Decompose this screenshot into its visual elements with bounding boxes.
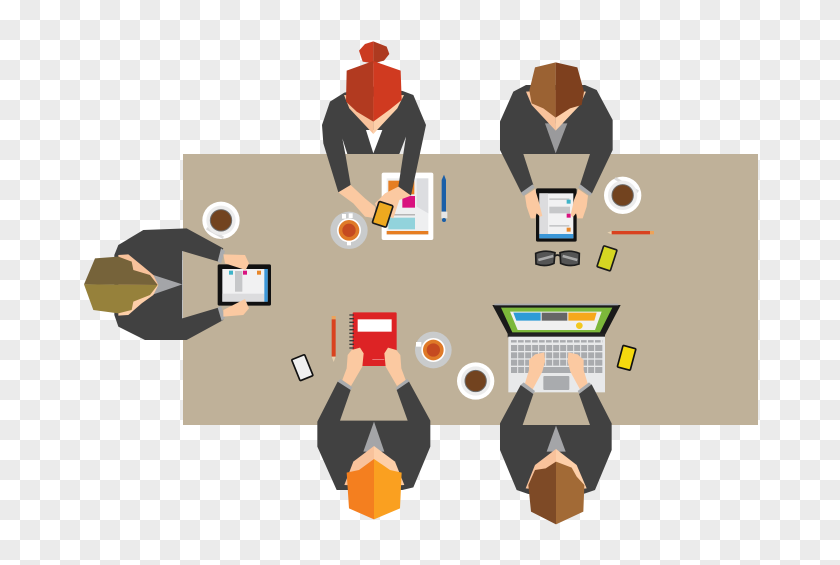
- hands: [342, 348, 406, 386]
- person: olive hair, left: [84, 202, 271, 340]
- cuffs: [338, 379, 410, 391]
- person: brown hair, top right: [500, 62, 654, 271]
- jacket: [114, 228, 223, 340]
- hands: [338, 185, 411, 218]
- hair: [528, 462, 584, 524]
- hair bun: [359, 41, 389, 63]
- face: [118, 254, 158, 316]
- face and neck: [344, 95, 404, 134]
- face: [526, 90, 586, 131]
- tie: [547, 426, 566, 452]
- cuffs: [218, 248, 225, 321]
- face: [344, 446, 404, 487]
- table: [183, 154, 758, 425]
- phone: [617, 345, 636, 370]
- phone: [292, 355, 313, 381]
- coffee cup: [202, 202, 240, 239]
- jacket: [317, 382, 430, 490]
- shirt and tie: [545, 123, 567, 153]
- tea cup: [330, 212, 368, 249]
- face: [526, 449, 587, 492]
- pencil: [607, 231, 654, 234]
- glasses: [536, 251, 579, 266]
- tablet with list: [536, 188, 577, 242]
- hair: [84, 257, 158, 313]
- tie: [153, 275, 182, 294]
- coffee cup: [604, 177, 641, 214]
- person: red hair with bun, top left: [322, 41, 447, 249]
- person: brown hair at laptop, bottom right: [457, 304, 636, 524]
- laptop: [492, 304, 621, 392]
- cuffs: [521, 184, 592, 196]
- notebook: [349, 312, 397, 366]
- coffee cup: [457, 363, 494, 399]
- pen: [441, 175, 447, 222]
- coffee cup: [457, 362, 494, 400]
- cuffs: [521, 382, 592, 394]
- tablet: [218, 264, 271, 306]
- hair: [529, 62, 584, 118]
- tea cup: [415, 332, 452, 368]
- shirt: [366, 130, 382, 153]
- hands: [525, 352, 588, 390]
- jacket: [500, 85, 613, 194]
- tablet with page layout: [382, 173, 433, 240]
- hair: [346, 61, 402, 122]
- hands: [223, 254, 249, 317]
- jacket: [322, 87, 426, 196]
- hair: [347, 459, 402, 519]
- phone: [372, 201, 393, 227]
- jacket: [500, 384, 612, 494]
- hands: [525, 189, 588, 218]
- phone: [597, 246, 617, 271]
- tie: [363, 422, 384, 452]
- pencil: [332, 316, 336, 362]
- person: orange hair, bottom left: [292, 312, 494, 519]
